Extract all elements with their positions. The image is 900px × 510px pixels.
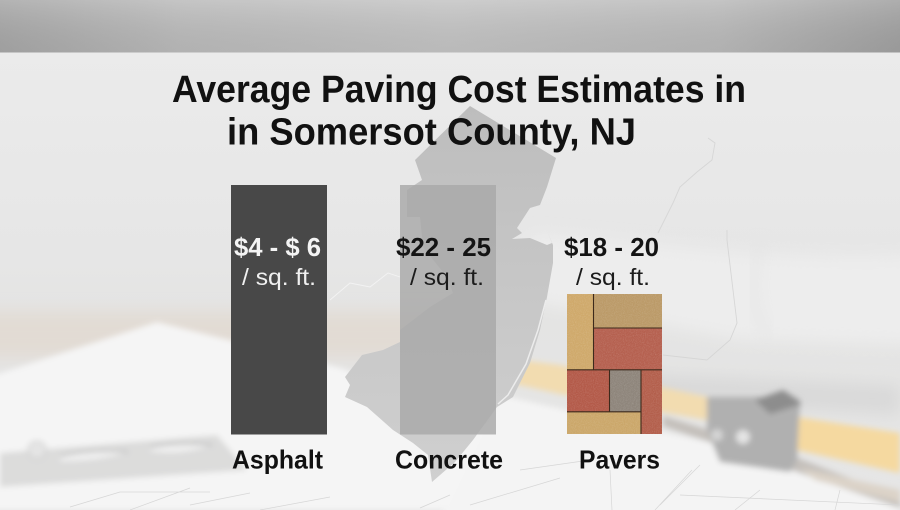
barrier island gap along coast (498, 300, 546, 404)
title (172, 69, 746, 154)
concrete unit: / sq. ft. (410, 264, 484, 290)
concrete price: $22 - 25 (396, 232, 491, 262)
asphalt label: Asphalt (232, 444, 323, 474)
concrete label: Concrete (395, 444, 503, 474)
concrete column (395, 185, 503, 474)
decorative state outlines (330, 138, 737, 360)
asphalt price: $4 - $ 6 (234, 232, 321, 262)
asphalt column (231, 185, 327, 474)
asphalt unit: / sq. ft. (242, 264, 316, 290)
title: Average Paving Cost Estimates in (172, 69, 746, 111)
pavers column (564, 232, 662, 474)
pavers unit: / sq. ft. (576, 264, 650, 290)
title: in Somersot County, NJ (227, 112, 636, 154)
concrete bar (400, 185, 496, 434)
pavers label: Pavers (579, 444, 660, 474)
New Jersey state silhouette (345, 106, 556, 482)
header band (0, 0, 900, 52)
asphalt bar (231, 185, 327, 434)
blueprint map lines (70, 460, 900, 510)
pavers price: $18 - 20 (564, 232, 659, 262)
pavers swatch (567, 294, 662, 434)
